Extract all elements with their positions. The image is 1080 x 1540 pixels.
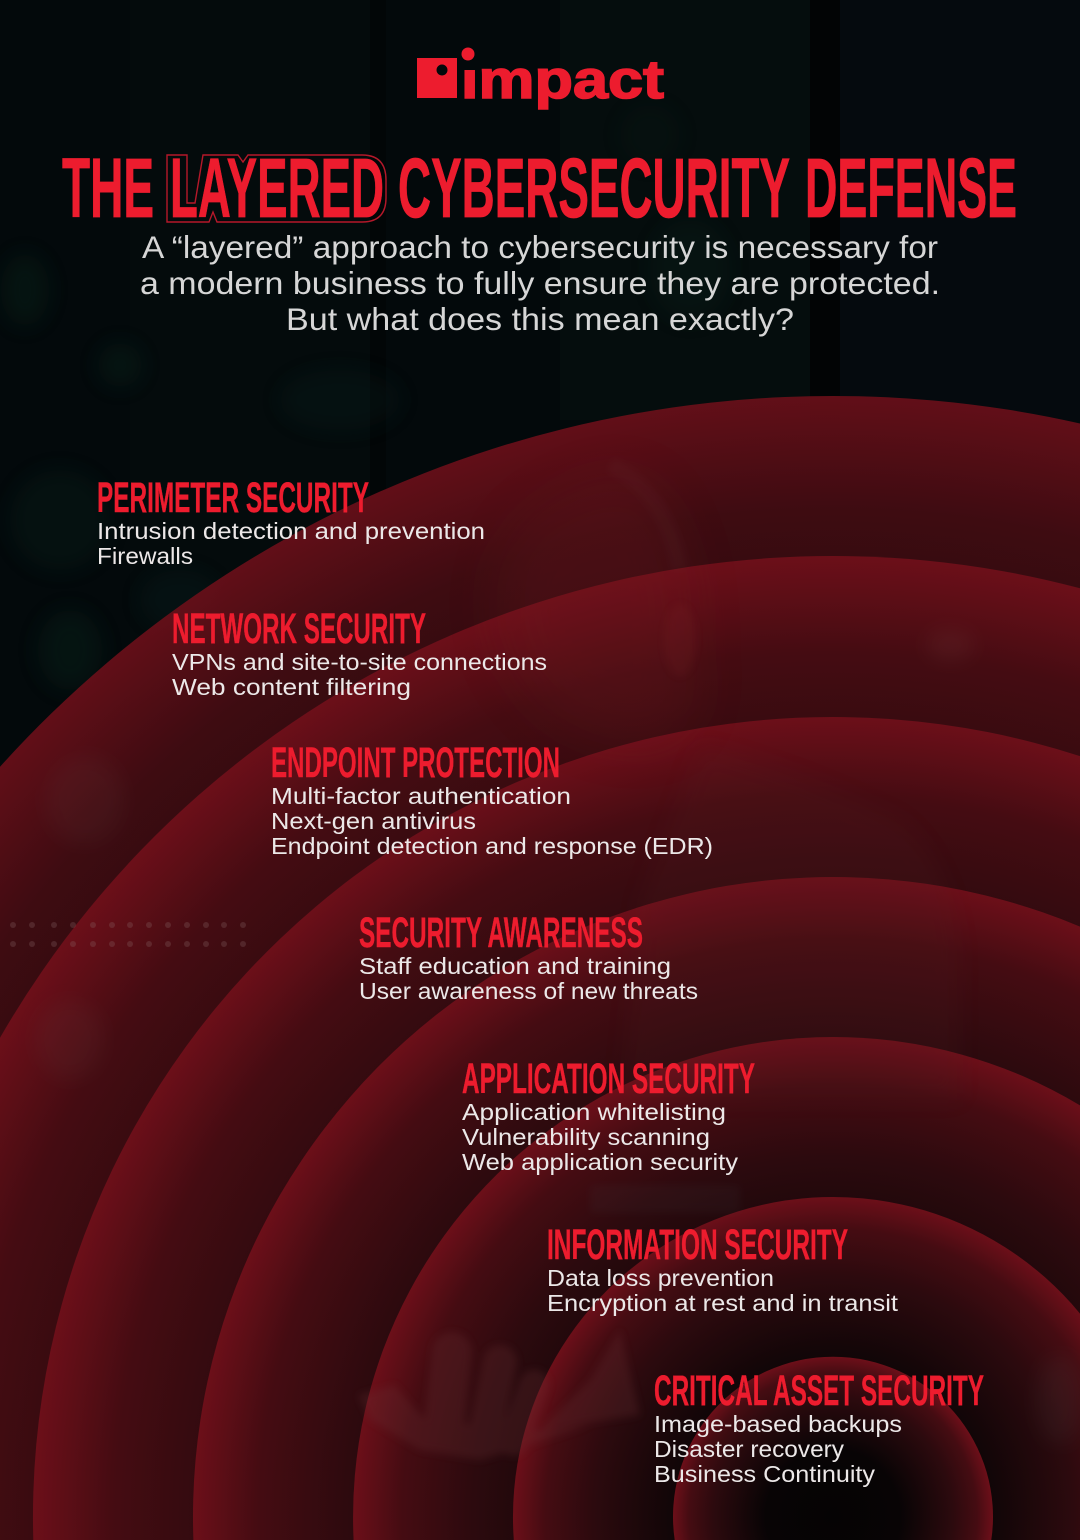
list: network items: VPNs and site-to-site connections bbox=[172, 649, 547, 675]
title bbox=[62, 141, 1017, 235]
intro text bbox=[140, 229, 940, 337]
list: awareness items bbox=[359, 953, 698, 1004]
list: network items bbox=[172, 649, 547, 700]
list: perimeter items bbox=[97, 518, 485, 569]
title: THE bbox=[62, 141, 154, 235]
list: application items bbox=[462, 1099, 739, 1175]
title: LAYERED bbox=[170, 141, 384, 235]
icon: logo i-dot bbox=[462, 48, 474, 60]
heading: network security: NETWORK SECURITY bbox=[172, 606, 426, 653]
heading: endpoint protection: ENDPOINT PROTECTION bbox=[271, 740, 560, 787]
panel: critical asset security bbox=[654, 1368, 984, 1487]
list: awareness items: User awareness of new threats bbox=[359, 978, 698, 1004]
list: information items: Encryption at rest and in transit bbox=[547, 1290, 899, 1316]
logo dot mask bbox=[460, 55, 476, 70]
ring: perimeter bbox=[0, 396, 1080, 1540]
photo overlay: man at keyboard bbox=[35, 465, 1080, 1460]
list: information items: Data loss prevention bbox=[547, 1265, 774, 1291]
list: perimeter items: Intrusion detection and prevention bbox=[97, 518, 485, 544]
list: network items: Web content filtering bbox=[172, 674, 411, 700]
list: critical asset items: Disaster recovery bbox=[654, 1436, 845, 1462]
ring: application bbox=[353, 1037, 1080, 1540]
list: application items: Application whitelisting bbox=[462, 1099, 726, 1125]
list: information items bbox=[547, 1265, 899, 1316]
list: critical asset items: Business Continuity bbox=[654, 1461, 876, 1487]
list: endpoint items: Multi-factor authentication bbox=[271, 783, 571, 809]
ring: information bbox=[513, 1197, 1080, 1540]
hand bbox=[358, 1330, 640, 1460]
list: endpoint items: Endpoint detection and response (EDR) bbox=[271, 833, 713, 859]
panel: application security bbox=[462, 1056, 755, 1175]
list: awareness items: Staff education and training bbox=[359, 953, 671, 979]
panel: perimeter security bbox=[97, 475, 485, 569]
list: endpoint items bbox=[271, 783, 713, 859]
ring: endpoint bbox=[33, 717, 1080, 1540]
icon: logo square bbox=[417, 58, 457, 98]
panel: security awareness bbox=[359, 910, 698, 1004]
heading: information security: INFORMATION SECURITY bbox=[547, 1222, 848, 1269]
heading: security awareness: SECURITY AWARENESS bbox=[359, 910, 643, 957]
panel: network security bbox=[172, 606, 547, 700]
panel: endpoint protection bbox=[271, 740, 713, 859]
panel: concentric defense rings bbox=[0, 396, 1080, 1540]
list: endpoint items: Next-gen antivirus bbox=[271, 808, 476, 834]
outline around LAYERED bbox=[167, 155, 386, 222]
ring: network bbox=[0, 556, 1080, 1540]
list: perimeter items: Firewalls bbox=[97, 543, 193, 569]
list: application items: Vulnerability scanning bbox=[462, 1124, 710, 1150]
panel: information security bbox=[547, 1222, 899, 1316]
list: critical asset items bbox=[654, 1411, 902, 1487]
logo wordmark: impact bbox=[461, 50, 664, 110]
intro text: But what does this mean exactly? bbox=[286, 301, 794, 337]
ring: awareness bbox=[193, 877, 1080, 1540]
ring: critical asset bbox=[673, 1357, 993, 1540]
decorative dot grid bbox=[10, 922, 246, 947]
heading: application security: APPLICATION SECURITY bbox=[462, 1056, 755, 1103]
intro text: a modern business to fully ensure they are protected. bbox=[140, 265, 940, 301]
list: application items: Web application security bbox=[462, 1149, 739, 1175]
heading: perimeter security: PERIMETER SECURITY bbox=[97, 475, 369, 522]
intro text: A “layered” approach to cybersecurity is necessary for bbox=[142, 229, 938, 265]
list: critical asset items: Image-based backups bbox=[654, 1411, 902, 1437]
logo: impact bbox=[417, 48, 664, 110]
